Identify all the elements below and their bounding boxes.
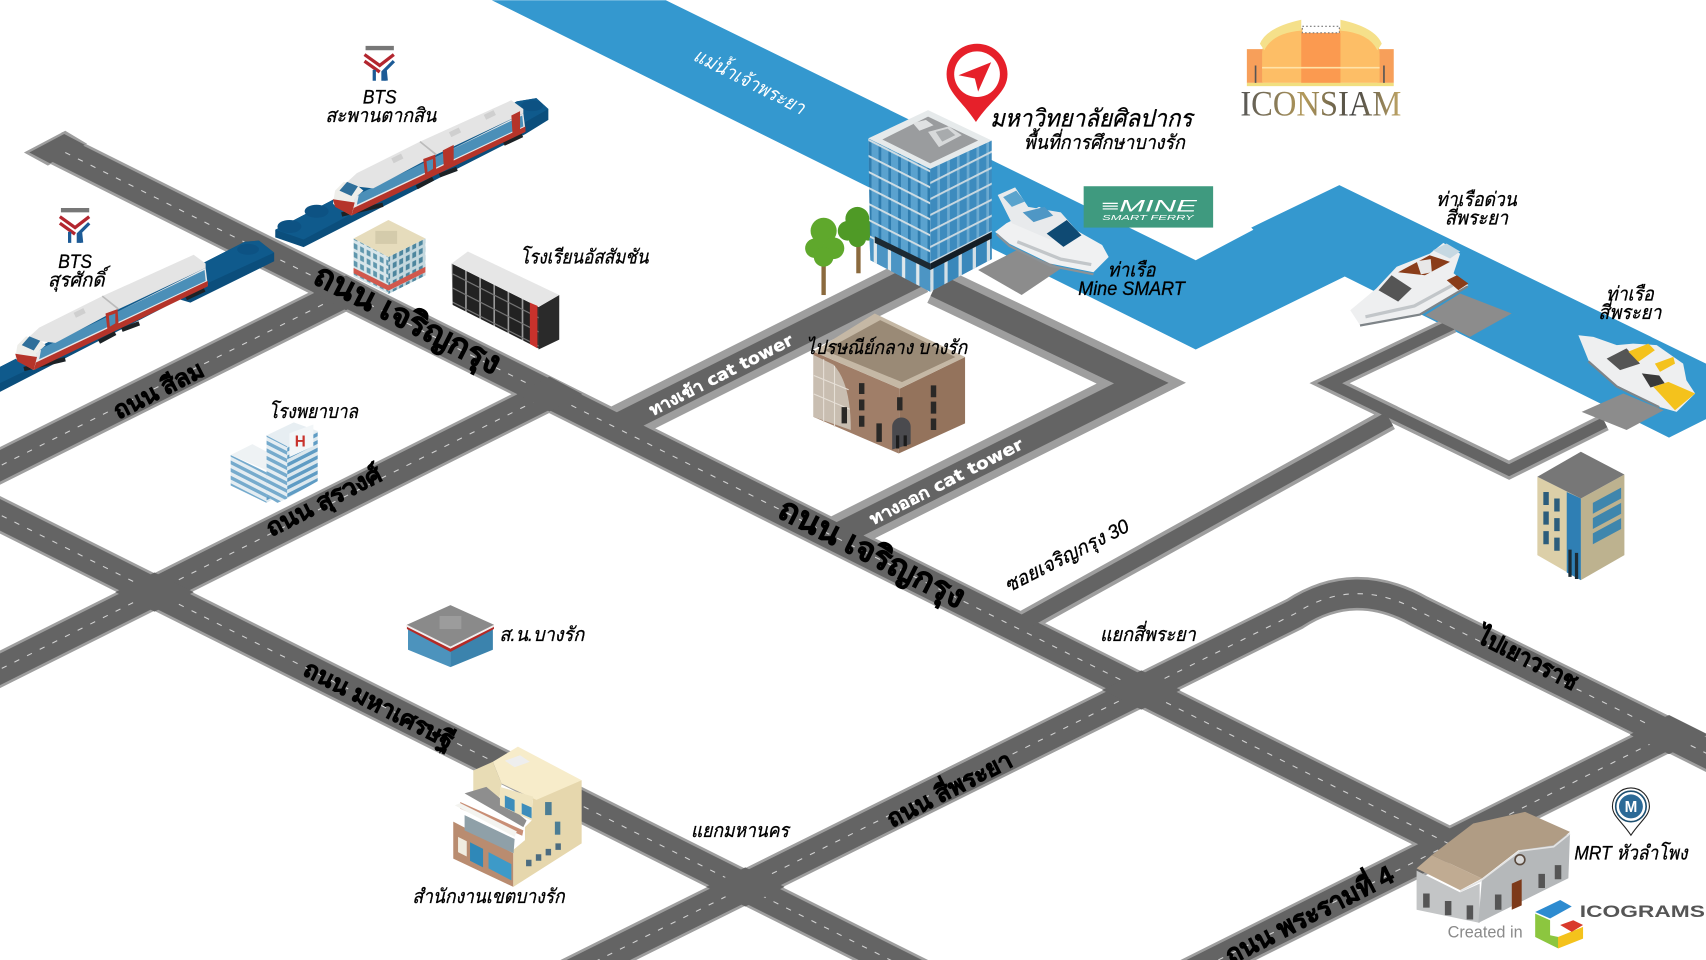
label: cat tower entrance: ทางเข้า cat tower: [646, 330, 796, 420]
label: Surawong: ถนน สุรวงศ์: [261, 460, 388, 543]
river: Chao Phraya: [492, 0, 1706, 438]
logo: Mine Smart Ferry: SMART FERRY: [1102, 213, 1195, 222]
label: BTS Surasak: สุรศักดิ์: [48, 265, 111, 292]
icon: location pin: [947, 44, 1007, 122]
label: Silom: ถนน สีลม: [109, 356, 208, 425]
trees: [805, 207, 878, 295]
label: Si Phraya express pier: สี่พระยา: [1445, 203, 1509, 229]
icon: MRT pin: [1612, 788, 1649, 835]
logo: ICOGRAMS credit: ICOGRAMS: [1580, 903, 1705, 921]
building: hospital: H: [295, 433, 306, 450]
pier: Si Phraya: [1582, 394, 1664, 430]
label: Si Phraya express pier: ท่าเรือด่วน: [1436, 189, 1517, 211]
label: district office: สำนักงานเขตบางรัก: [412, 886, 566, 908]
label: central post office: ไปรษณีย์กลาง บางรัก: [806, 336, 968, 359]
logo: ICOGRAMS credit: [1448, 900, 1705, 948]
boat: Si Phraya: [1578, 335, 1695, 412]
logo: Mine Smart Ferry: [1084, 186, 1213, 228]
building: office near Charoen Krung: [354, 220, 425, 294]
label: Si Phraya: ถนน สี่พระยา: [881, 743, 1017, 833]
label: Si Phraya junction: แยกสี่พระยา: [1100, 620, 1197, 646]
train: upper: [333, 100, 526, 216]
label: Mine Smart pier: [1078, 260, 1187, 300]
pier: Si Phraya express: [1425, 294, 1512, 337]
icon: MRT pin: M: [1625, 799, 1637, 816]
label: Mine Smart pier: ท่าเรือ: [1108, 260, 1157, 282]
boat: Mine Smart: [995, 187, 1109, 274]
building: condo near Si Phraya pier: [1537, 452, 1624, 580]
label: Si Phraya pier: [1598, 283, 1662, 324]
label: Charoen Krung lower: ถนน เจริญกรุง: [771, 490, 972, 618]
label: cat tower exit: ทางออก cat tower: [866, 435, 1026, 529]
label: BTS Surasak: [48, 251, 111, 292]
building: Silpakorn University tower: [868, 110, 992, 292]
label: Bang Rak campus: พื้นที่การศึกษาบางรัก: [1024, 128, 1186, 154]
building: Bang Rak district office: [453, 747, 582, 887]
building: central post office: [813, 314, 965, 453]
logo: ICONSIAM: [1240, 20, 1401, 124]
label: BTS Saphan Taksin: สะพานตากสิน: [325, 105, 437, 127]
label: to Yaowarat: ไปเยาวราช: [1471, 620, 1583, 696]
logo: Mine Smart Ferry: ≡MINE: [1101, 197, 1199, 215]
building: hospital: [231, 422, 318, 503]
label: Mine Smart pier: Mine SMART: [1078, 278, 1187, 300]
logo: ICOGRAMS credit: Created in: [1448, 924, 1523, 942]
label: police station: ส.น.บางรัก: [499, 624, 585, 646]
logo: ICONSIAM: ICONSIAM: [1240, 84, 1401, 124]
label: Mahanakhon junction: แยกมหานคร: [691, 820, 791, 842]
icon: BTS logo Surasak: [60, 208, 89, 243]
label: BTS Saphan Taksin: BTS: [363, 87, 397, 109]
BTS track: lower: [0, 241, 274, 392]
label: Si Phraya pier: ท่าเรือ: [1606, 283, 1655, 305]
train: lower: [15, 255, 208, 370]
pier: Mine Smart: [978, 250, 1062, 295]
label: Mahasetthi: ถนน มหาเศรษฐี: [298, 655, 459, 756]
label: BTS Surasak: BTS: [58, 251, 92, 273]
label: MRT Hua Lamphong: MRT หัวลำโพง: [1574, 842, 1689, 865]
label: hospital: โรงพยาบาล: [269, 400, 359, 423]
label: Silpakorn University: มหาวิทยาลัยศิลปากร: [990, 105, 1195, 132]
BTS track: upper: [275, 98, 548, 247]
label: Soi Charoen Krung 30: ซอยเจริญกรุง 30: [1001, 515, 1133, 598]
label: Si Phraya pier: สี่พระยา: [1598, 298, 1662, 324]
label: Charoen Krung upper: ถนน เจริญกรุง: [307, 256, 507, 384]
label: BTS Saphan Taksin: [325, 87, 437, 127]
boat: Si Phraya express: [1350, 243, 1468, 326]
label: Assumption school: โรงเรียนอัสสัมชัน: [520, 245, 649, 268]
label: Chao Phraya river: แม่น้ำเจ้าพระยา: [690, 41, 811, 120]
building: Assumption school: [452, 252, 559, 349]
building: Bang Rak police station: [407, 605, 494, 667]
icon: BTS logo Saphan Taksin: [364, 46, 394, 81]
building: Hua Lamphong station: [1417, 812, 1570, 923]
label: Si Phraya express pier: [1436, 189, 1517, 229]
